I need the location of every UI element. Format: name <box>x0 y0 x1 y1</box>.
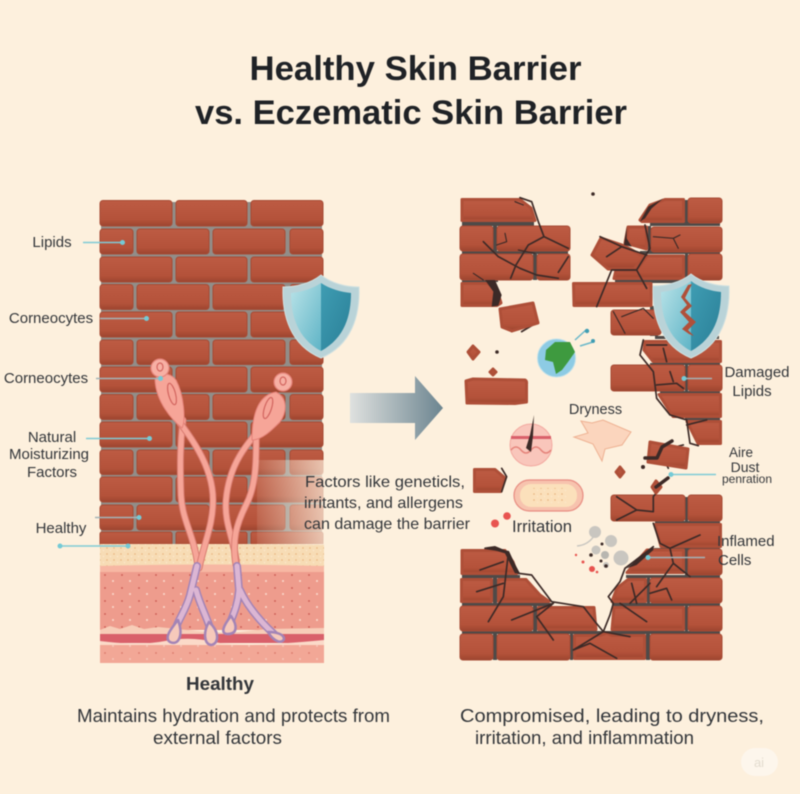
text: healthy description: external factors <box>153 727 282 748</box>
text: eczematic description <box>460 705 764 748</box>
label: aire dust penetration: Dust <box>731 459 759 475</box>
label: corneocytes lower <box>4 370 163 387</box>
bricks upper right <box>574 198 722 444</box>
loose bricks and rubble <box>466 192 688 493</box>
skin layers <box>100 544 324 663</box>
arrow <box>350 376 443 440</box>
icon: dry skin flake <box>574 420 631 461</box>
icon: earth <box>538 329 595 377</box>
text: factors note: can damage the barrier <box>304 516 471 533</box>
label: lipids: Lipids <box>32 234 72 251</box>
hair follicle: left <box>151 359 213 568</box>
cracks lower <box>477 488 700 658</box>
title: Healthy Skin Barrier <box>250 50 582 88</box>
text: factors note: Factors like geneticls, <box>305 474 465 491</box>
label: natural moisturizing factors: Natural <box>28 429 76 446</box>
label: aire dust penetration: Aire <box>729 445 753 460</box>
label: natural moisturizing factors: Moisturizing <box>9 446 89 463</box>
watermark <box>741 748 778 776</box>
label: inflamed cells: Cells <box>718 552 751 569</box>
cracked shield icon <box>653 274 729 358</box>
label: corneocytes upper <box>9 310 149 327</box>
mortar <box>462 200 720 660</box>
text: factors note: irritants, and allergens <box>304 495 463 512</box>
label: inflamed cells <box>646 533 775 569</box>
label: damaged lipids: Damaged <box>724 364 790 381</box>
label: healthy <box>36 515 142 548</box>
label: lipids <box>32 234 125 251</box>
label: irritation: Irritation <box>512 518 572 536</box>
cracks upper <box>473 198 707 468</box>
hair roots <box>168 566 284 645</box>
text: factors note <box>304 474 471 533</box>
icon: bandage <box>514 480 583 511</box>
label: healthy: Healthy <box>36 520 87 537</box>
title <box>195 50 627 132</box>
icon: skin cross-section <box>510 415 552 466</box>
label: damaged lipids <box>682 364 790 400</box>
label: irritation <box>491 512 572 536</box>
label: inflamed cells: Inflamed <box>717 533 775 550</box>
text: eczematic description: Compromised, leading to dryness, <box>460 705 764 726</box>
label: aire dust penetration <box>668 445 772 486</box>
healthy shield icon <box>283 275 359 358</box>
text: healthy description: Maintains hydration and protects from <box>77 705 390 726</box>
label: natural moisturizing factors <box>9 429 152 481</box>
damaged brick wall <box>460 198 722 660</box>
label: aire dust penetration: penration <box>722 472 772 486</box>
heading: healthy: Healthy <box>186 673 255 694</box>
title: vs. Eczematic Skin Barrier <box>195 94 627 132</box>
hair follicle: right <box>226 373 292 568</box>
bricks upper left <box>460 200 570 306</box>
label: dryness <box>569 402 631 461</box>
label: damaged lipids: Lipids <box>732 383 772 400</box>
fade behind factors note <box>257 460 324 545</box>
panel: eczematic skin barrier <box>460 192 790 748</box>
label: corneocytes upper: Corneocytes <box>9 310 93 327</box>
label: natural moisturizing factors: Factors <box>27 464 77 481</box>
bricks lower left <box>460 550 596 660</box>
bricks lower right <box>574 495 722 660</box>
icon: dust and allergens <box>575 526 628 573</box>
watermark: ai <box>754 755 764 770</box>
panel: healthy skin barrier <box>4 200 390 748</box>
label: dryness: Dryness <box>569 402 622 418</box>
healthy brick wall <box>100 200 323 546</box>
label: corneocytes lower: Corneocytes <box>4 370 88 387</box>
text: healthy description <box>77 705 390 748</box>
text: eczematic description: irritation, and inflammation <box>475 727 694 748</box>
